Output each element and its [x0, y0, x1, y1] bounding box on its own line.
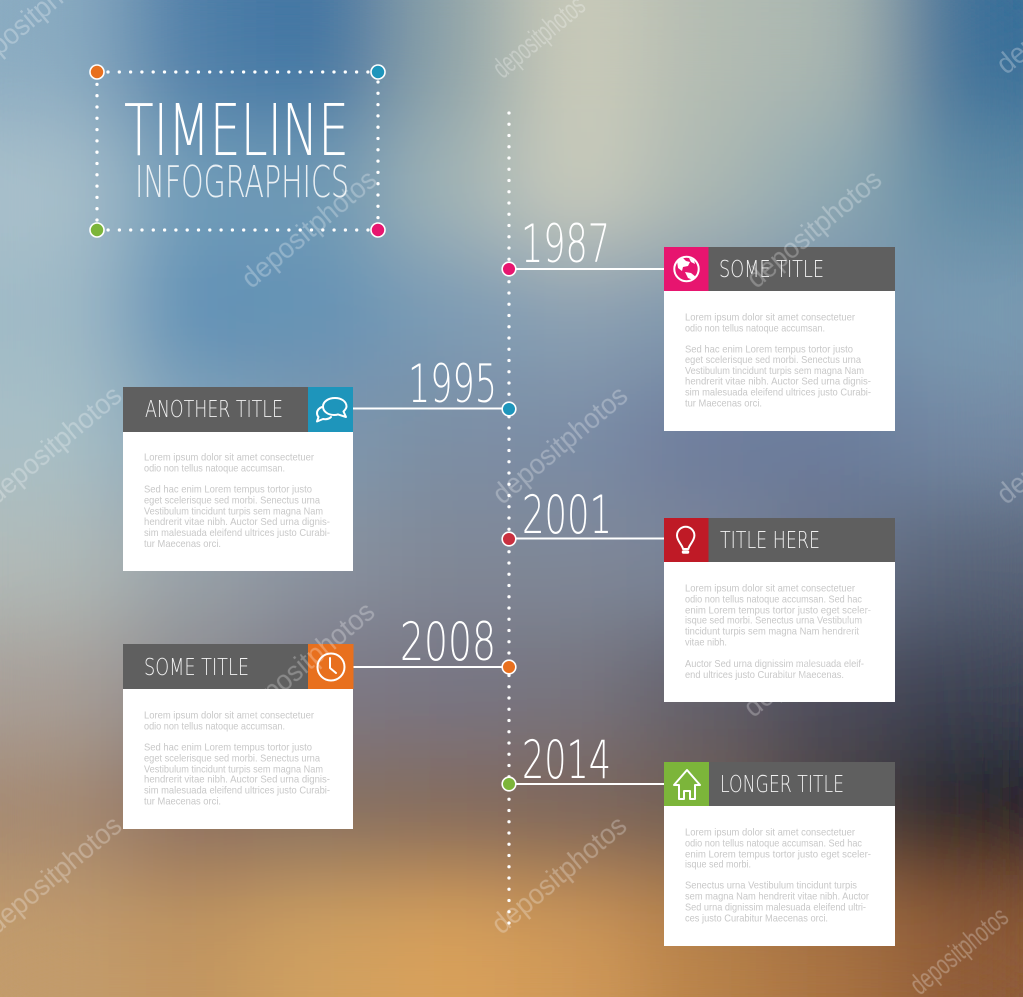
title: TIMELINE	[124, 89, 349, 172]
panel: 1987 card: eget scelerisque sed morbi. Senectus urna	[685, 354, 861, 366]
panel: 2008 card: Vestibulum tincidunt turpis sem magna Nam	[144, 764, 323, 776]
panel: 1987 card: odio non tellus natoque accumsan.	[685, 322, 825, 334]
watermarks: depositphotos	[235, 163, 383, 295]
panel: 2014 card: sem magna Nam hendrerit vitae nibh. Auctor	[685, 890, 869, 902]
panel: 1995 card	[123, 387, 353, 571]
timeline axis	[507, 113, 511, 925]
panel: 2001 card: Lorem ipsum dolor sit amet consectetuer	[685, 582, 855, 594]
milestone 1995	[353, 354, 516, 416]
panel: 2014 card: Senectus urna Vestibulum tincidunt turpis	[685, 880, 857, 892]
panel: 1995 card: Sed hac enim Lorem tempus tortor justo	[144, 484, 312, 496]
panel: 2014 card: Lorem ipsum dolor sit amet consectetuer	[685, 826, 855, 838]
icon: globe	[674, 257, 699, 281]
panel: 1995 card: ANOTHER TITLE	[145, 397, 283, 423]
panel: 1995 card: Lorem ipsum dolor sit amet consectetuer	[144, 452, 314, 464]
panel: 2001 card: enim Lorem tempus tortor justo eget sceler-	[685, 604, 871, 616]
panel: 2001 card: end ultrices justo Curabitur Maecenas.	[685, 669, 844, 681]
panel: 2008 card: eget scelerisque sed morbi. Senectus urna	[144, 752, 320, 764]
watermarks: depositphotos	[485, 809, 633, 941]
panel: 2008 card: tur Maecenas orci.	[144, 796, 221, 808]
panel: 2014 card: odio non tellus natoque accumsan. Sed hac	[685, 838, 862, 850]
panel: 2008 card: odio non tellus natoque accumsan.	[144, 720, 285, 732]
panel: 2008 card: hendrerit vitae nibh. Auctor Sed urna dignis-	[144, 774, 330, 786]
panel: 2014 card: Sed urna dignissim malesuada eleifend ultri-	[685, 902, 866, 914]
subtitle: INFOGRAPHICS	[135, 157, 349, 208]
panel: 2008 card: SOME TITLE	[144, 655, 249, 681]
milestone 2014: 2014	[522, 730, 611, 791]
title frame	[90, 65, 385, 237]
milestone 1995: 1995	[408, 354, 497, 415]
panel: 1995 card: sim malesuada eleifend ultrices justo Curabi-	[144, 527, 330, 539]
panel: 1987 card: hendrerit vitae nibh. Auctor Sed urna dignis-	[685, 376, 871, 388]
panel: 2001 card	[664, 518, 895, 702]
panel: 1995 card: odio non tellus natoque accumsan.	[144, 462, 285, 474]
panel: 2001 card: Auctor Sed urna dignissim malesuada eleif-	[685, 658, 864, 670]
milestone 2001: 2001	[522, 485, 612, 546]
watermarks: depositphotos	[740, 163, 888, 295]
icon: clock	[318, 654, 344, 680]
panel: 2008 card: sim malesuada eleifend ultrices justo Curabi-	[144, 784, 330, 796]
panel: 1987 card: SOME TITLE	[719, 257, 824, 283]
panel: 2001 card: odio non tellus natoque accumsan. Sed hac	[685, 594, 862, 606]
panel: 1995 card: hendrerit vitae nibh. Auctor Sed urna dignis-	[144, 516, 330, 528]
watermarks: depositphotos	[233, 595, 381, 727]
milestone 2008: 2008	[400, 612, 496, 673]
panel: 2001 card: isque sed morbi. Senectus urna Vestibulum	[685, 614, 862, 626]
milestone 2008	[353, 612, 516, 674]
panel: 2001 card: tincidunt turpis sem magna Nam hendrerit	[685, 626, 859, 638]
icon: speech bubbles	[317, 398, 346, 422]
panel: 2014 card	[664, 762, 895, 946]
icon: house	[674, 770, 700, 799]
panel: 1987 card: Lorem ipsum dolor sit amet consectetuer	[685, 312, 855, 324]
icon: light bulb	[677, 527, 694, 552]
panel: 1987 card	[664, 247, 895, 431]
panel: 1995 card: eget scelerisque sed morbi. Senectus urna	[144, 494, 320, 506]
panel: 2008 card	[123, 644, 354, 829]
panel: 1987 card: sim malesuada eleifend ultrices justo Curabi-	[685, 386, 871, 398]
panel: 2008 card: Sed hac enim Lorem tempus tortor justo	[144, 742, 312, 754]
panel: 2014 card: isque sed morbi.	[685, 858, 751, 870]
panel: 2001 card: TITLE HERE	[720, 528, 820, 554]
panel: 2014 card: enim Lorem tempus tortor justo eget sceler-	[685, 848, 871, 860]
panel: 1995 card: Vestibulum tincidunt turpis sem magna Nam	[144, 506, 323, 518]
watermarks: depositphotos	[486, 379, 634, 511]
panel: 1987 card: Sed hac enim Lorem tempus tortor justo	[685, 344, 853, 356]
panel: 2008 card: Lorem ipsum dolor sit amet consectetuer	[144, 710, 314, 722]
panel: 1987 card: tur Maecenas orci.	[685, 398, 762, 410]
panel: 1995 card: tur Maecenas orci.	[144, 538, 221, 550]
watermarks: depositphotos	[737, 592, 885, 724]
panel: 1987 card: Vestibulum tincidunt turpis sem magna Nam	[685, 365, 864, 377]
panel: 2001 card: vitae nibh.	[685, 636, 727, 648]
milestone 1987: 1987	[521, 214, 610, 275]
panel: 2014 card: LONGER TITLE	[720, 772, 844, 798]
panel: 2014 card: ces justo Curabitur Maecenas orci.	[685, 912, 828, 924]
